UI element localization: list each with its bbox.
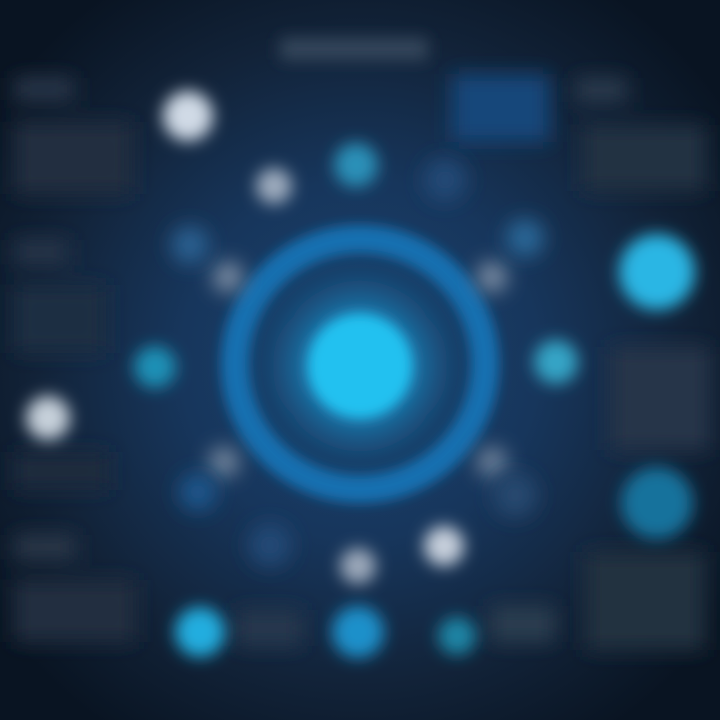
network nodes: dim blue [171,158,544,567]
central circle [308,314,412,418]
large cyan circle right [619,234,695,310]
title [280,38,428,60]
network nodes: white [26,91,464,584]
network nodes: small grey [209,262,507,477]
panel: left column text blocks [14,78,136,642]
large teal circle right [621,467,693,539]
panel: top right blue block [452,74,550,142]
central glow [294,300,426,432]
panel: bottom text blocks [236,606,555,646]
central ring [235,239,485,489]
panel: right column text blocks [575,78,710,650]
network nodes: cyan [134,143,578,658]
